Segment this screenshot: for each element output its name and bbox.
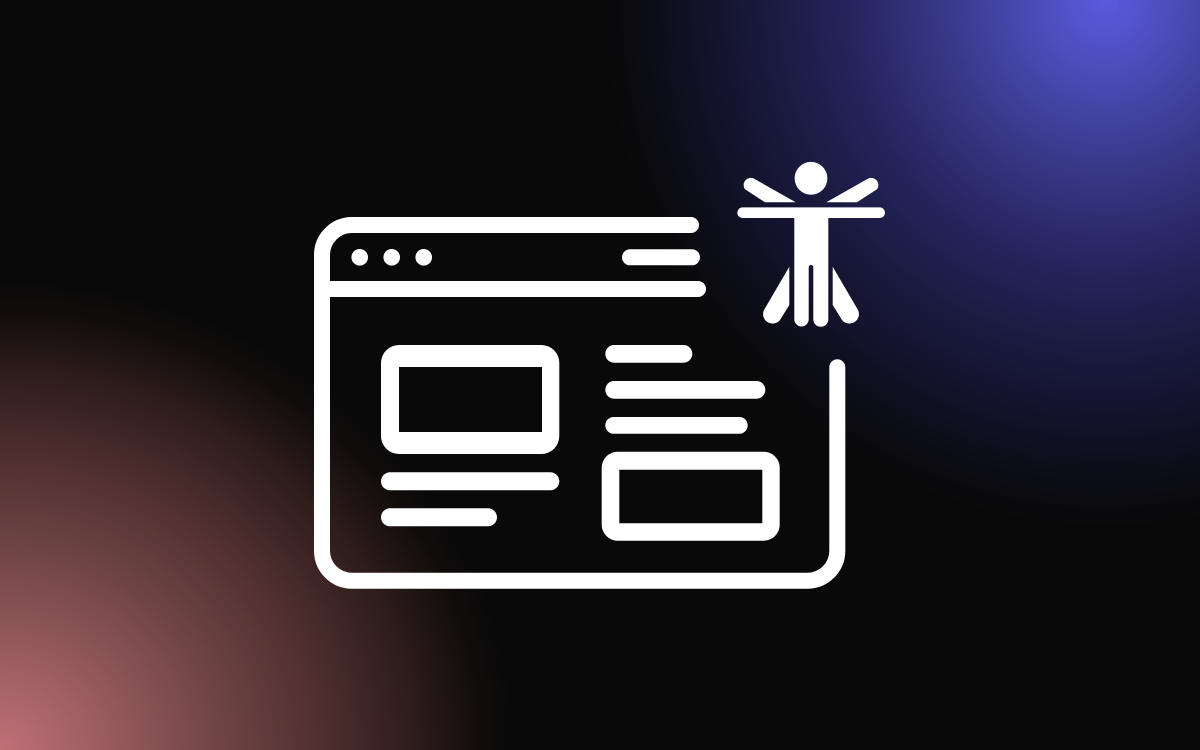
torso and inner legs [794, 217, 828, 327]
left text lines [381, 472, 559, 526]
toolbar menu line [622, 249, 700, 265]
icon: browser window [322, 225, 837, 581]
left image card [381, 345, 559, 454]
right text lines [605, 345, 765, 434]
browser frame outline [322, 225, 837, 581]
toolbar divider [322, 281, 698, 297]
raised arms [744, 178, 878, 202]
head [795, 162, 827, 195]
icon: accessibility figure [737, 162, 885, 327]
outer legs [763, 267, 859, 324]
right image card [602, 452, 780, 541]
outstretched arms [737, 207, 885, 218]
window dots [351, 249, 432, 266]
